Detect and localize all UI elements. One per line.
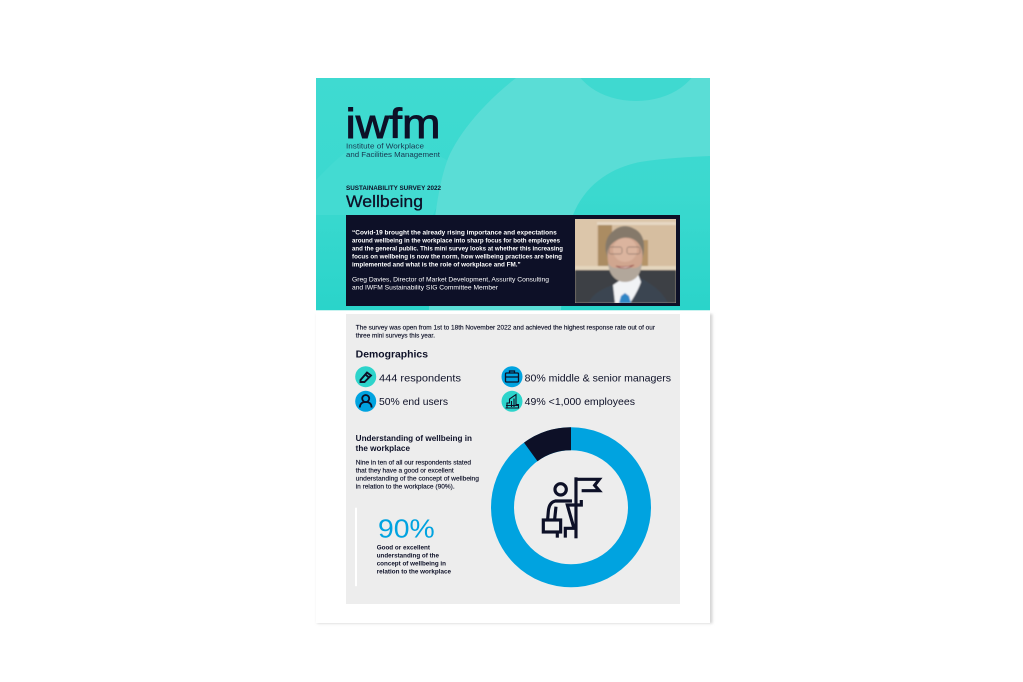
portrait photo <box>575 219 676 303</box>
logo: iwfm: and Facilities Management <box>346 150 440 159</box>
teal header band <box>316 78 710 310</box>
icon: pencil <box>355 366 376 387</box>
quote attribution <box>352 277 549 292</box>
light grey content panel <box>346 314 680 604</box>
demographics heading: Demographics <box>356 350 428 361</box>
quote text: around wellbeing in the workplace into sharp focus for both employees <box>352 238 560 244</box>
demographic: managers <box>502 366 671 387</box>
icon: person with flag and briefcase <box>543 477 599 538</box>
donut chart: 90 percent <box>502 427 640 576</box>
quote attribution: and IWFM Sustainability SIG Committee Member <box>352 285 499 292</box>
logo: iwfm: Institute of Workplace <box>346 142 424 150</box>
survey label: SUSTAINABILITY SURVEY 2022 <box>346 185 441 192</box>
callout caption: Good or excellent <box>377 544 431 551</box>
title: Wellbeing <box>346 193 423 211</box>
understanding paragraph <box>356 460 479 491</box>
callout caption: relation to the workplace <box>377 569 451 576</box>
page paper with shadow <box>316 308 712 624</box>
understanding heading <box>356 434 472 453</box>
demographic: respondents <box>355 366 461 387</box>
demographic: employees: 49% <1,000 employees <box>525 397 635 408</box>
logo: iwfm: iwfm <box>346 100 440 147</box>
infographic page <box>316 78 714 624</box>
demographic: employees <box>502 391 635 412</box>
understanding paragraph: understanding of the concept of wellbeing <box>356 476 479 483</box>
quote text <box>352 230 563 269</box>
callout number: 90% <box>378 514 435 544</box>
icon: briefcase <box>502 366 522 387</box>
quote text: “Covid-19 brought the already rising importance and expectations <box>352 230 557 236</box>
callout caption <box>377 544 451 576</box>
understanding paragraph: in relation to the workplace (90%). <box>356 484 455 491</box>
callout caption: understanding of the <box>377 553 439 560</box>
callout: 90 percent <box>355 508 451 586</box>
survey intro text <box>356 324 656 340</box>
quote panel <box>346 215 680 306</box>
understanding paragraph: that they have a good or excellent <box>356 468 454 475</box>
demographic: end users <box>355 391 448 412</box>
icon: person <box>355 391 376 412</box>
quote attribution: Greg Davies, Director of Market Development, Assurity Consulting <box>352 277 549 284</box>
survey intro text: three mini surveys this year. <box>356 333 435 340</box>
quote text: and the general public. This mini survey looks at whether this increasing <box>352 246 563 252</box>
survey intro text: The survey was open from 1st to 18th November 2022 and achieved the highest response rate out of our <box>356 324 656 332</box>
quote text: focus on wellbeing is now the norm, how wellbeing practices are being <box>352 254 562 261</box>
callout caption: concept of wellbeing in <box>377 561 446 568</box>
understanding paragraph: Nine in ten of all our respondents stated <box>356 460 471 467</box>
icon: building <box>502 391 522 412</box>
demographic: managers: 80% middle & senior managers <box>525 374 671 385</box>
demographic: respondents: 444 respondents <box>379 374 461 385</box>
demographic: end users: 50% end users <box>379 397 448 408</box>
understanding heading: Understanding of wellbeing in <box>356 434 472 443</box>
understanding heading: the workplace <box>356 444 411 453</box>
quote text: implemented and what is the role of workplace and FM.” <box>352 262 521 269</box>
